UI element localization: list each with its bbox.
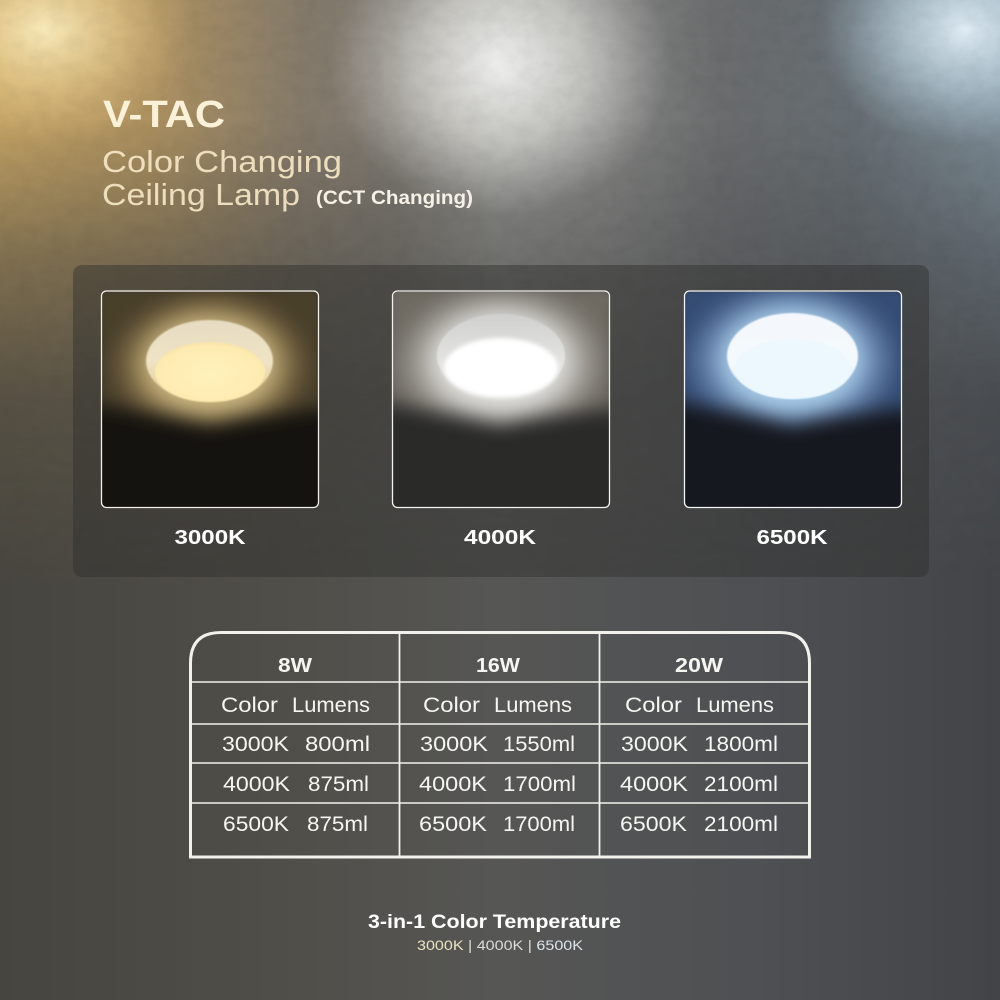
label: 6500K: 6500K	[756, 527, 828, 549]
card: 6500K lamp	[684, 290, 902, 508]
column 8W: Color	[221, 694, 278, 717]
column 20W: 20W	[675, 655, 723, 677]
column 16W: 3000K	[420, 733, 488, 756]
column 8W: 4000K	[223, 773, 290, 796]
subtitle line 2: Ceiling Lamp	[102, 177, 300, 212]
column 8W: 875ml	[307, 813, 368, 836]
column 16W: 1550ml	[503, 733, 575, 756]
CCT note: (CCT Changing)	[316, 188, 473, 209]
label: 3000K: 3000K	[174, 527, 246, 549]
column 16W: Lumens	[494, 694, 572, 717]
footer temperatures: 3000K | 4000K | 6500K	[417, 937, 584, 953]
lamp diffuser	[155, 342, 265, 402]
footer heading: 3-in-1 Color Temperature	[368, 912, 621, 933]
column 20W	[620, 655, 778, 836]
lamp housing	[727, 313, 858, 399]
lamp diffuser	[444, 338, 558, 398]
card: 4000K lamp	[392, 290, 610, 508]
column 8W: 800ml	[305, 733, 370, 756]
column 8W: 3000K	[222, 733, 289, 756]
column 20W: 4000K	[620, 773, 688, 796]
card: 3000K lamp	[100, 290, 320, 508]
label: 4000K: 4000K	[464, 527, 537, 549]
column 20W: Lumens	[696, 694, 774, 717]
column 20W: 2100ml	[704, 813, 778, 836]
column 16W: 1700ml	[503, 773, 576, 796]
lamp housing	[437, 314, 565, 398]
column 20W: 3000K	[621, 733, 688, 756]
column 16W: 16W	[476, 655, 520, 677]
column 8W: Lumens	[292, 694, 370, 717]
column 16W: 4000K	[419, 773, 487, 796]
specification table	[190, 632, 810, 857]
column 16W: 1700ml	[503, 813, 575, 836]
column 16W: 6500K	[419, 813, 487, 836]
column 16W	[419, 655, 576, 836]
column 8W	[221, 655, 370, 836]
column 8W: 6500K	[223, 813, 289, 836]
title block	[102, 94, 473, 212]
lamp diffuser	[735, 339, 851, 399]
column 8W: 875ml	[308, 773, 369, 796]
subtitle line 1: Color Changing	[102, 144, 342, 179]
column 8W: 8W	[278, 655, 312, 677]
panel: colour temperature comparison	[73, 265, 929, 577]
column 20W: 1800ml	[704, 733, 778, 756]
brand name: V-TAC	[103, 94, 225, 136]
table frame and grid	[190, 632, 810, 857]
column 20W: 6500K	[620, 813, 687, 836]
lamp housing	[146, 320, 273, 402]
column 20W: 2100ml	[704, 773, 778, 796]
column 16W: Color	[423, 694, 480, 717]
footer caption	[368, 912, 621, 953]
column 20W: Color	[625, 694, 682, 717]
